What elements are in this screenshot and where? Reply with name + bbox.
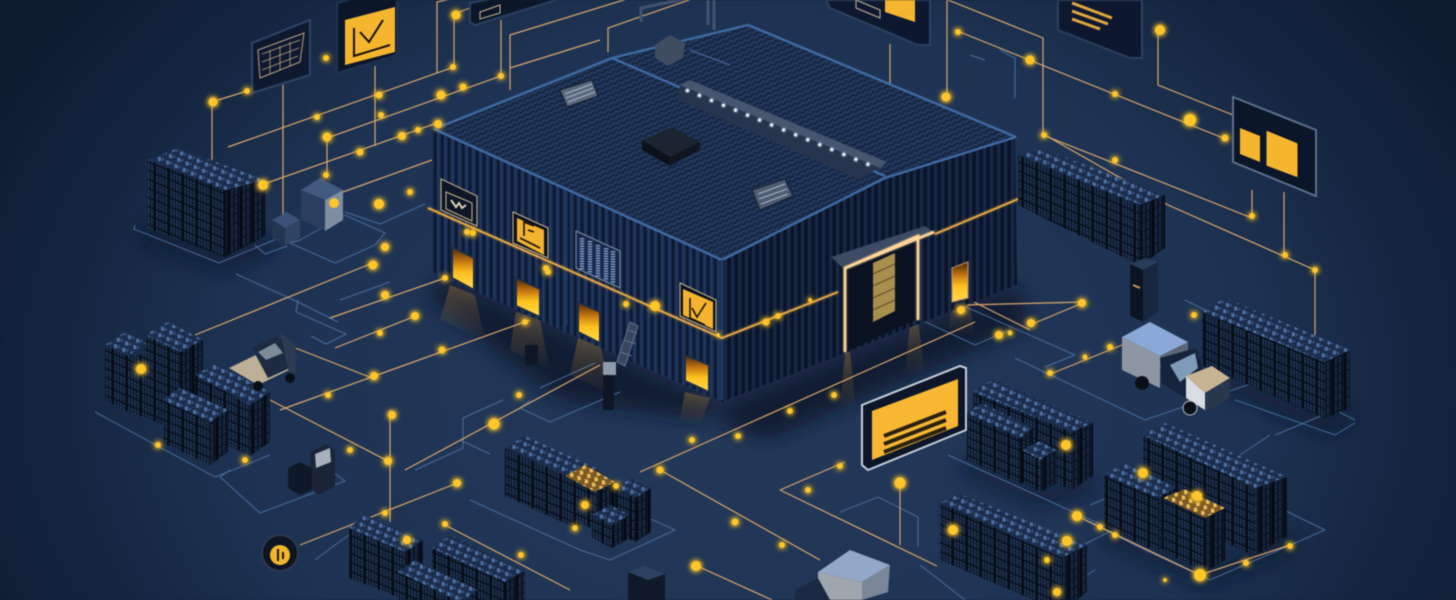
roof edges [434, 25, 1016, 260]
roof [437, 25, 1015, 258]
dial icon [262, 535, 298, 571]
loading door 4 [685, 355, 709, 392]
container stack: far right [1202, 298, 1350, 418]
loading door 2 [516, 278, 540, 317]
forklift left [229, 332, 296, 391]
main entrance [831, 226, 935, 352]
container stack: lower right [1104, 423, 1287, 572]
container stack: upper left [148, 148, 265, 257]
loading door 1 [452, 247, 474, 290]
container stack: bottom left [349, 515, 525, 600]
charger unit right [1130, 258, 1158, 322]
roof unit center [642, 127, 700, 166]
container stack: middle right [967, 379, 1093, 492]
floating panel 3 [470, 0, 556, 25]
ladder [617, 322, 638, 366]
roof vent right [752, 179, 793, 210]
loading door 3 [578, 302, 600, 343]
rooftop fan [655, 35, 730, 66]
delivery truck right [1122, 322, 1230, 415]
gate frame on the roof [641, 0, 714, 30]
floating panel 4 [826, 0, 930, 45]
container stack: bottom right [940, 494, 1087, 600]
bright wall light line [428, 168, 1092, 338]
right wall [722, 137, 1017, 402]
delivery truck bottom [795, 550, 890, 600]
roof vent left [560, 80, 598, 107]
floor plate outlines and blue circuit lines [95, 50, 1355, 600]
kiosk lower left [288, 444, 335, 495]
container stack: bottom centre [505, 436, 651, 548]
louvered window [576, 231, 620, 288]
floating panel 2 [337, 0, 397, 73]
loading door 5 [952, 262, 968, 302]
bollard left [525, 345, 538, 365]
floating panel 1 [252, 20, 310, 93]
bollard figure [603, 362, 616, 410]
warehouse building [432, 25, 1017, 402]
large yellow sign [862, 366, 966, 470]
bottom box [628, 566, 665, 600]
floating panel 6 [1233, 97, 1316, 196]
control cabinet [301, 178, 343, 231]
left wall [432, 130, 722, 402]
glowing yellow nodes [136, 10, 1318, 596]
wall sign yellow F [513, 212, 548, 258]
ridge light bar [678, 80, 887, 180]
wall sign yellow check [680, 283, 716, 332]
container stack: right of warehouse [1018, 148, 1165, 266]
small utility box [272, 212, 300, 245]
orange connection lines [195, 0, 1315, 600]
reflected light on the floor [440, 285, 975, 425]
container stack: left cluster [105, 322, 270, 465]
wall sign outlined [441, 179, 477, 226]
floating panel 5 [1058, 0, 1142, 58]
floor shadow around the warehouse [140, 228, 1350, 585]
